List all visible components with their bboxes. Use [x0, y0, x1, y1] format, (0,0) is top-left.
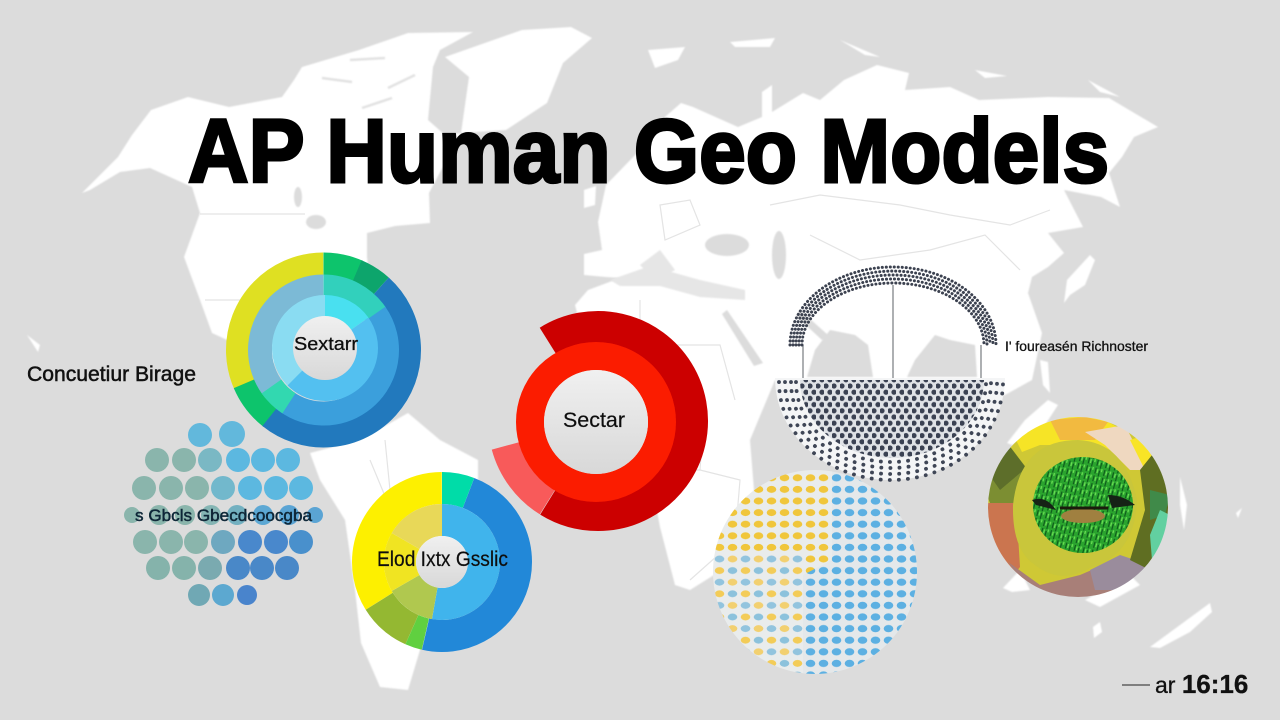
- area: terracotta: [988, 503, 1020, 571]
- footer tag: ar 16:16: [1155, 669, 1248, 699]
- label: circle grid: s Gbcls Gbecdcoocgba: [135, 506, 313, 525]
- chart: yellow and blue sector donut: [340, 460, 544, 664]
- chart: stippled semicircle model: [775, 267, 1005, 480]
- chart: hexagonal circle grid: [124, 421, 323, 606]
- area: top yellow and peach: [1016, 417, 1116, 452]
- label: sector 1: Sextarr: [294, 334, 358, 354]
- chart: red sector donut: [471, 294, 725, 548]
- area: green centre: [1033, 457, 1133, 553]
- label: concentric left: Concuetiur Birage: [27, 363, 196, 386]
- label: stippled model: I' foureasén Richnoster: [1005, 338, 1148, 354]
- area: right dark olive: [1130, 456, 1168, 568]
- area: left greens: [988, 448, 1025, 503]
- chart: yellow and blue dot disk: [713, 470, 918, 675]
- chart: concentric rings donut: [202, 229, 445, 471]
- arc band of dots: [790, 267, 996, 345]
- label: sector 2: Sectar: [563, 409, 625, 432]
- area: bottom mauve: [1008, 562, 1112, 597]
- label: sector 3: Elod Ixtx Gsslic: [377, 548, 508, 571]
- inner dense half-disc dots: [800, 380, 984, 458]
- outer half-disc dots: [779, 382, 1003, 480]
- area: yellow olive ring: [1013, 440, 1120, 544]
- title: AP Human Geo Models: [188, 101, 1109, 202]
- image: collage globe: [988, 417, 1168, 597]
